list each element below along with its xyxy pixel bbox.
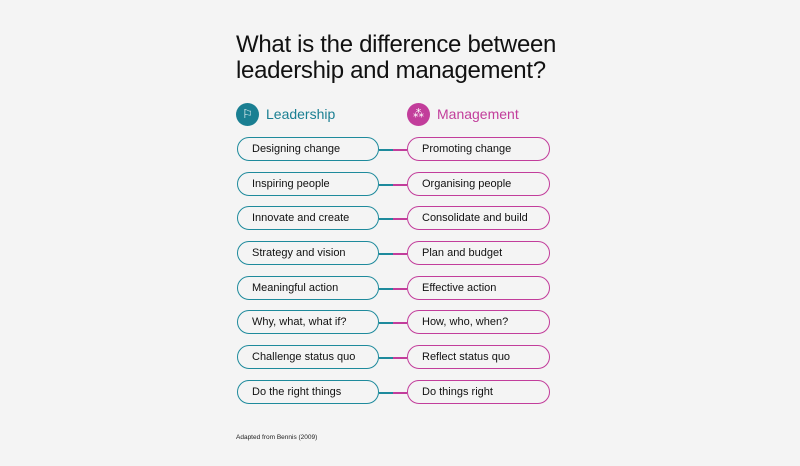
comparison rows: Do things right	[422, 386, 493, 398]
heading: management: Management	[437, 106, 519, 122]
icon: management	[407, 103, 430, 126]
heading: leadership: Leadership	[266, 106, 335, 122]
comparison rows: Effective action	[422, 282, 496, 294]
comparison rows: Consolidate and build	[422, 212, 528, 224]
comparison rows: Plan and budget	[422, 247, 502, 259]
comparison rows	[237, 137, 550, 404]
comparison rows: Reflect status quo	[422, 351, 510, 363]
icon: leadership: ⚐	[242, 107, 253, 121]
title: leadership and management?	[236, 57, 546, 84]
icon: management: ⁂	[413, 108, 424, 120]
comparison rows: Promoting change	[422, 143, 511, 155]
title: What is the difference between	[236, 31, 556, 58]
comparison rows: How, who, when?	[422, 316, 508, 328]
comparison rows: Strategy and vision	[252, 247, 346, 259]
icon: leadership	[236, 103, 259, 126]
source note: Adapted from Bennis (2009)	[236, 434, 317, 441]
comparison rows: Why, what, what if?	[252, 316, 347, 328]
comparison rows: Inspiring people	[252, 178, 330, 190]
comparison rows: Designing change	[252, 143, 340, 155]
comparison rows: Meaningful action	[252, 282, 338, 294]
comparison rows: Challenge status quo	[252, 351, 355, 363]
comparison rows: Innovate and create	[252, 212, 349, 224]
title	[236, 31, 556, 84]
comparison rows: Organising people	[422, 178, 511, 190]
comparison rows: Do the right things	[252, 386, 341, 398]
